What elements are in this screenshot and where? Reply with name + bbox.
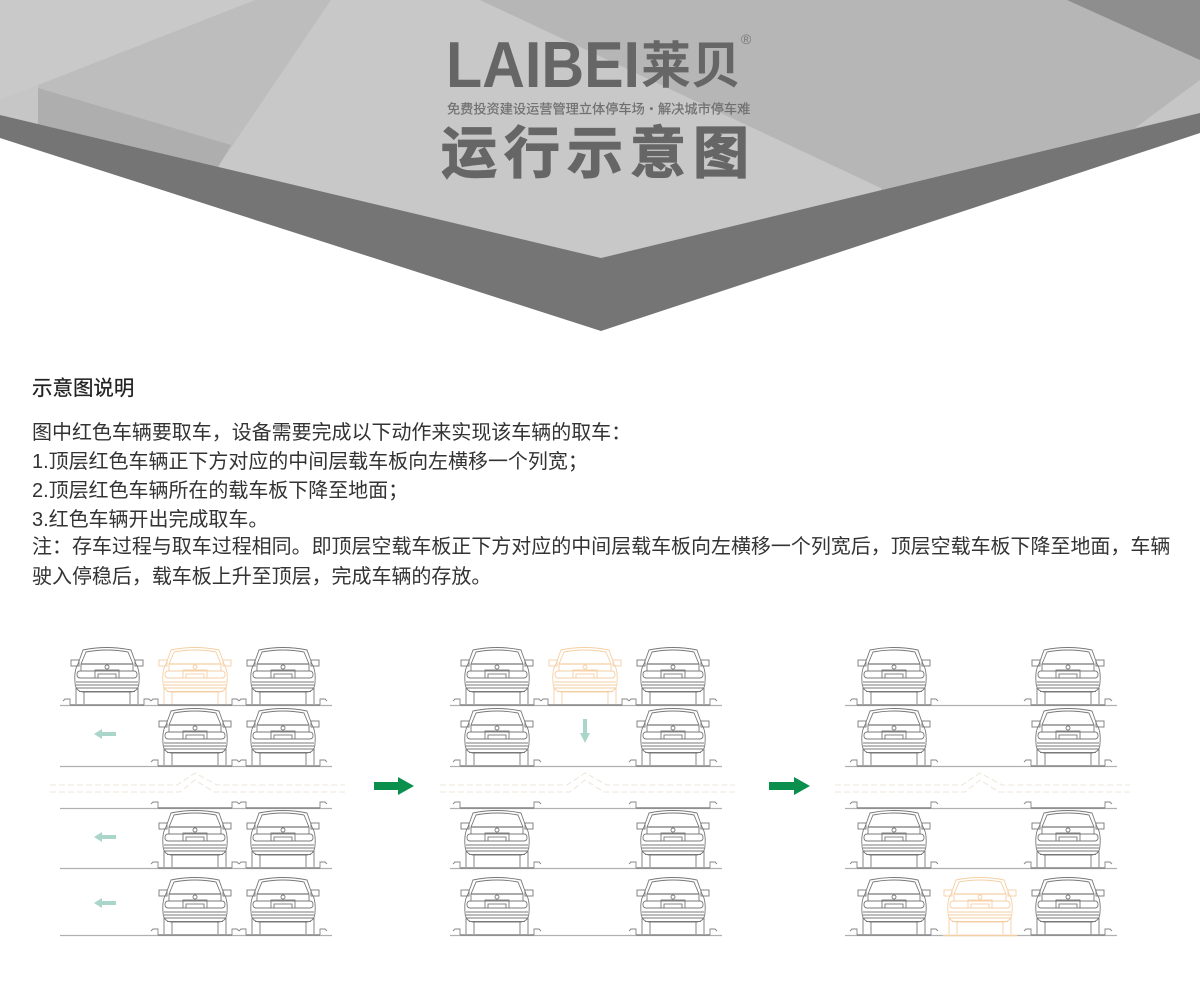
logo: LAIBEI bbox=[446, 28, 640, 101]
explanation text: 驶入停稳后，载车板上升至顶层，完成车辆的存放。 bbox=[32, 566, 491, 588]
explanation text bbox=[32, 422, 1170, 588]
title: 运行示意图 bbox=[441, 109, 756, 190]
arrow: step 2 to step 3 bbox=[769, 777, 810, 795]
empty pallets bbox=[850, 802, 1112, 808]
left arrows bbox=[94, 729, 116, 908]
lower row cars bbox=[453, 810, 717, 868]
explanation text: 注：存车过程与取车过程相同。即顶层空载车板正下方对应的中间层载车板向左横移一个列宽后，顶层空载车板下降至地面，车辆 bbox=[32, 536, 1170, 558]
panel: step 1 bbox=[50, 648, 345, 936]
empty pallets bbox=[453, 802, 717, 808]
explanation text: 2.顶层红色车辆所在的载车板下降至地面； bbox=[32, 480, 408, 502]
middle row cars bbox=[151, 708, 327, 766]
lower row cars bbox=[151, 810, 327, 868]
panel: step 2 bbox=[440, 648, 735, 936]
logo bbox=[446, 26, 752, 101]
explanation text: 1.顶层红色车辆正下方对应的中间层载车板向左横移一个列宽； bbox=[32, 451, 588, 473]
down arrow bbox=[580, 719, 590, 743]
ground row cars bbox=[151, 878, 327, 935]
tagline: 免费投资建设运营管理立体停车场·解决城市停车难 bbox=[447, 98, 750, 118]
lower row cars bbox=[850, 810, 1112, 868]
ground row cars bbox=[453, 878, 717, 935]
explanation heading: 示意图说明 bbox=[32, 377, 134, 400]
top row cars bbox=[850, 648, 1112, 705]
explanation text: 图中红色车辆要取车，设备需要完成以下动作来实现该车辆的取车： bbox=[32, 422, 631, 444]
arrow: step 1 to step 2 bbox=[374, 777, 414, 795]
panel: step 3 bbox=[835, 648, 1130, 936]
top row cars bbox=[453, 648, 717, 705]
explanation text: 3.红色车辆开出完成取车。 bbox=[32, 509, 268, 531]
logo: ® bbox=[741, 31, 752, 47]
empty pallets bbox=[151, 802, 327, 808]
middle row cars bbox=[453, 708, 717, 766]
logo: 莱贝 bbox=[641, 26, 741, 98]
header banner bbox=[0, 0, 1200, 331]
ground row cars bbox=[850, 878, 1112, 936]
middle row cars bbox=[850, 708, 1112, 766]
top row cars bbox=[63, 648, 327, 705]
